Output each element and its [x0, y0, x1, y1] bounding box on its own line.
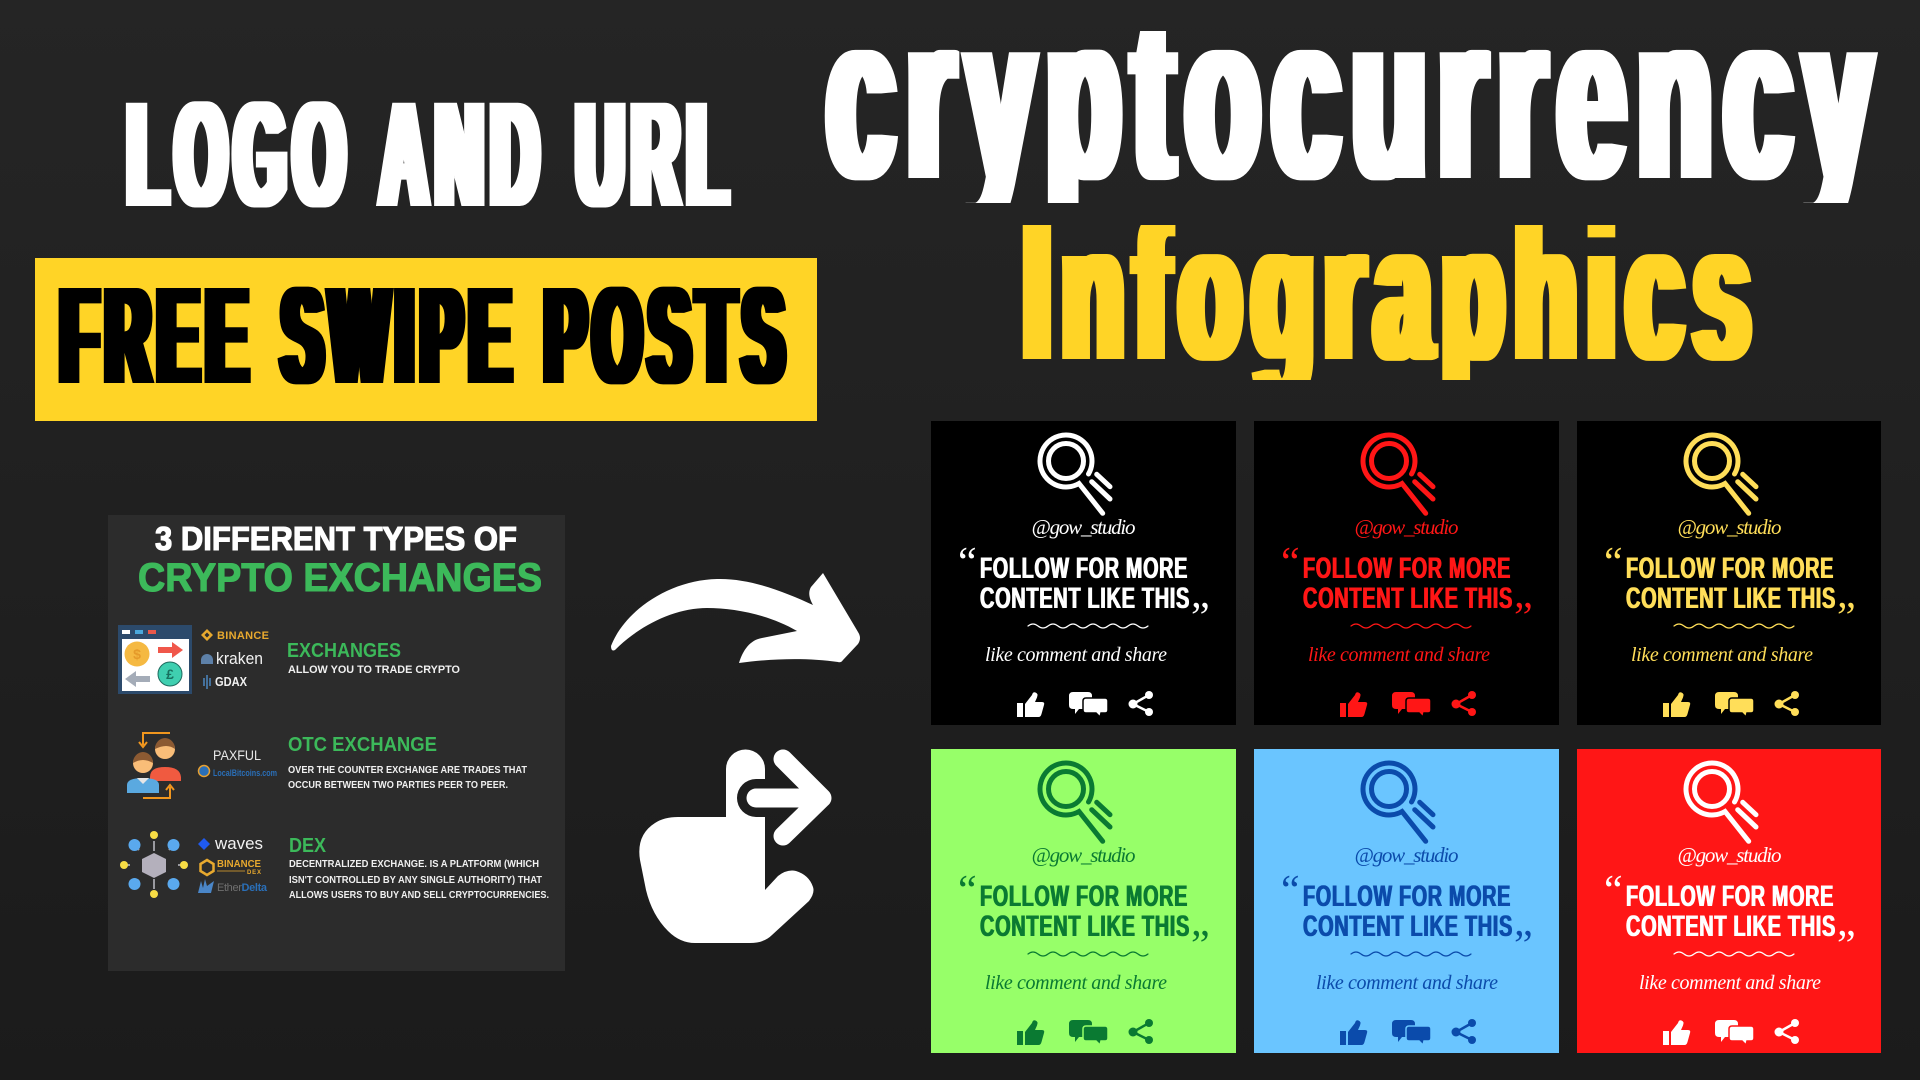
- icon: comments: [1715, 1020, 1754, 1045]
- icon: exchange window: £: [166, 666, 174, 682]
- tagline: like comment and share: [985, 644, 1167, 666]
- quote text: CONTENT LIKE THIS: [980, 910, 1190, 943]
- tagline: like comment and share: [1639, 972, 1821, 994]
- card: yellow on black: [1577, 421, 1881, 725]
- arrow: curved right: [611, 573, 860, 663]
- row text: otc exchange: [288, 734, 528, 791]
- card: white on red: [1577, 749, 1881, 1053]
- card: green: [931, 749, 1236, 1053]
- quote text: “: [1281, 540, 1300, 586]
- handle: @gow_studio: [1032, 843, 1136, 867]
- quote text: “: [1604, 540, 1623, 586]
- quote text: “: [958, 540, 977, 586]
- row text: exchanges: ALLOW YOU TO TRADE CRYPTO: [288, 664, 460, 676]
- icon: decentralized network: [120, 831, 188, 898]
- card: white on black: [931, 421, 1236, 725]
- icon: share: [1128, 691, 1153, 716]
- panel heading: CRYPTO EXCHANGES: [138, 556, 542, 600]
- icon: like: [1663, 692, 1690, 717]
- quote text: ”: [1837, 923, 1856, 969]
- banner: free swipe posts: [35, 258, 817, 421]
- wavy divider: [1351, 952, 1471, 956]
- icon: like: [1663, 1020, 1690, 1045]
- exchange logos: kraken: [216, 649, 263, 668]
- icon: like: [1017, 692, 1044, 717]
- exchange logos: BINANCE: [217, 630, 269, 642]
- icon: comments: [1392, 1020, 1431, 1045]
- quote text: FOLLOW FOR MORE: [1303, 880, 1511, 913]
- quote text: “: [958, 868, 977, 914]
- quote text: ”: [1514, 923, 1533, 969]
- dex logos: EtherDelta: [217, 882, 268, 894]
- icon: magnifier logo: [1363, 435, 1433, 513]
- icon: like: [1340, 1020, 1367, 1045]
- row text: dex: [289, 835, 549, 901]
- icon: comments: [1715, 692, 1754, 717]
- otc logos: PAXFUL: [213, 747, 261, 763]
- icon: magnifier logo: [1040, 435, 1110, 513]
- quote text: [958, 868, 1210, 969]
- card: red on black: [1254, 421, 1559, 725]
- quote text: [1604, 868, 1856, 969]
- quote text: [1281, 868, 1533, 969]
- quote text: ”: [1837, 595, 1856, 641]
- icon: magnifier logo: [1040, 763, 1110, 841]
- quote text: CONTENT LIKE THIS: [1303, 582, 1513, 615]
- icon: share: [1128, 1019, 1153, 1044]
- panel: crypto exchanges infographic: [108, 515, 565, 971]
- handle: @gow_studio: [1678, 515, 1782, 539]
- text: FREE SWIPE POSTS: [60, 259, 792, 413]
- handle: @gow_studio: [1032, 515, 1136, 539]
- handle: @gow_studio: [1354, 515, 1458, 539]
- handle: @gow_studio: [1354, 843, 1458, 867]
- otc logos: LocalBitcoins.com: [213, 768, 277, 778]
- row text: otc exchange: OVER THE COUNTER EXCHANGE ARE TRADES THAT: [288, 764, 528, 776]
- quote text: FOLLOW FOR MORE: [980, 552, 1188, 585]
- text: LOGO AND URL: [128, 70, 736, 238]
- quote text: [1281, 540, 1533, 641]
- icon: comments: [1392, 692, 1431, 717]
- icon: share: [1452, 1019, 1476, 1044]
- dex logos: [198, 834, 268, 894]
- row text: dex: ALLOWS USERS TO BUY AND SELL CRYPTOCURRENCIES.: [289, 889, 549, 901]
- dex logos: DEX: [247, 870, 261, 876]
- row text: exchanges: [287, 640, 460, 676]
- wavy divider: [1028, 624, 1148, 628]
- quote text: “: [1604, 868, 1623, 914]
- row text: exchanges: EXCHANGES: [287, 640, 401, 662]
- icon: magnifier logo: [1363, 763, 1433, 841]
- icon: exchange window: [118, 625, 192, 694]
- wavy divider: [1028, 952, 1148, 956]
- row text: otc exchange: OTC EXCHANGE: [288, 734, 437, 756]
- quote text: FOLLOW FOR MORE: [980, 880, 1188, 913]
- otc logos: [198, 747, 277, 778]
- row text: dex: DECENTRALIZED EXCHANGE. IS A PLATFORM (WHICH: [289, 858, 539, 870]
- icon: two people trading: [127, 733, 181, 798]
- icon: share: [1452, 691, 1476, 716]
- icon: share: [1774, 691, 1799, 716]
- icon: magnifier logo: [1686, 435, 1756, 513]
- row text: dex: DEX: [289, 835, 327, 857]
- wavy divider: [1351, 624, 1471, 628]
- dex logos: BINANCE: [217, 859, 261, 870]
- panel heading: 3 DIFFERENT TYPES OF: [155, 520, 517, 557]
- wavy divider: [1674, 952, 1794, 956]
- icon: comments: [1069, 1020, 1108, 1045]
- quote text: ”: [1191, 923, 1210, 969]
- icon: comments: [1069, 692, 1108, 717]
- row text: dex: ISN'T CONTROLLED BY ANY SINGLE AUTHORITY) THAT: [289, 874, 543, 886]
- exchange logos: GDAX: [215, 674, 247, 689]
- quote text: ”: [1514, 595, 1533, 641]
- tagline: like comment and share: [1316, 972, 1498, 994]
- icon: exchange window: $: [133, 646, 141, 662]
- icon: like: [1017, 1020, 1044, 1045]
- tagline: like comment and share: [1631, 644, 1813, 666]
- tagline: like comment and share: [1308, 644, 1490, 666]
- quote text: [958, 540, 1210, 641]
- quote text: CONTENT LIKE THIS: [1303, 910, 1513, 943]
- panel heading: [138, 520, 542, 600]
- quote text: CONTENT LIKE THIS: [980, 582, 1190, 615]
- quote text: [1604, 540, 1856, 641]
- quote text: FOLLOW FOR MORE: [1303, 552, 1511, 585]
- icon: share: [1774, 1019, 1799, 1044]
- exchange logos: [201, 629, 269, 689]
- quote text: ”: [1191, 595, 1210, 641]
- card: blue: [1254, 749, 1559, 1053]
- quote text: “: [1281, 868, 1300, 914]
- row text: otc exchange: OCCUR BETWEEN TWO PARTIES PEER TO PEER.: [288, 779, 508, 791]
- icon: swipe hand: [639, 750, 822, 943]
- tagline: like comment and share: [985, 972, 1167, 994]
- dex logos: waves: [214, 834, 263, 853]
- icon: magnifier logo: [1686, 763, 1756, 841]
- icon: like: [1340, 692, 1367, 717]
- wavy divider: [1674, 624, 1794, 628]
- handle: @gow_studio: [1678, 843, 1782, 867]
